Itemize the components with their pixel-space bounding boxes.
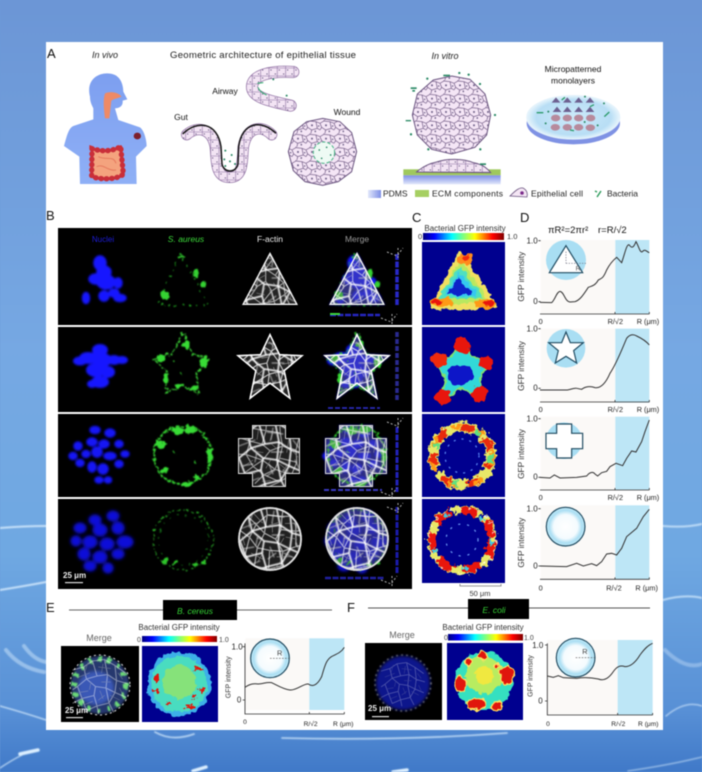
chart: star profile (516, 325, 649, 403)
chart: B. cereus profile: 1.0 (232, 642, 243, 651)
colorbar: 1.0 (219, 637, 229, 644)
chart: E. coli profile: R/√2 (611, 720, 626, 728)
heat map: cross (422, 414, 505, 497)
heat map (447, 643, 523, 720)
merge image (61, 646, 139, 722)
heat map: star (422, 327, 505, 412)
panel C: GFP heat maps (412, 210, 517, 598)
image row: triangle: S. aureus (168, 234, 205, 244)
species header: E. coli: E. coli (482, 605, 507, 615)
chart: E. coli profile: R (μm) (638, 721, 659, 728)
merge image (365, 643, 442, 720)
panel label D: D (520, 210, 529, 225)
chart: cross profile: R/√2 (608, 405, 623, 414)
chart: triangle profile: R (μm) (637, 317, 659, 326)
colorbar (418, 232, 517, 241)
chart: triangle profile: R/√2 (608, 317, 623, 326)
merge image: 25 μm (368, 704, 391, 713)
legend: PDMS, ECM, cell, bacteria: PDMS (383, 188, 408, 198)
colorbar title: Bacterial GFP intensity (138, 623, 220, 632)
chart: triangle profile: 0 (533, 297, 538, 306)
chart: triangle profile: 1.0 (527, 237, 538, 246)
tissue diagram: airway (252, 72, 293, 106)
colorbar (444, 634, 534, 642)
species header: B. cereus (69, 600, 332, 620)
chart: triangle profile: 0 (539, 317, 543, 326)
panel D: intensity charts (516, 210, 659, 593)
panel label F: F (347, 600, 355, 615)
colorbar: 1.0 (507, 232, 517, 241)
colorbar: 1.0 (524, 635, 534, 642)
panel B: confocal images (46, 208, 412, 589)
colorbar: 0 (418, 232, 422, 241)
heading: Micropatterned monolayers: Micropatterned (545, 64, 602, 74)
heat map: triangle (422, 242, 505, 325)
chart: cross profile: 0 (539, 493, 543, 502)
chart: B. cereus profile: 0 (237, 696, 242, 705)
chart: triangle profile: GFP intensity (516, 251, 526, 302)
chart: E. coli profile: 0 (538, 697, 543, 706)
image row: star (58, 325, 412, 412)
chart: cross profile: R (μm) (637, 493, 659, 502)
chart: star profile: 1.0 (527, 325, 538, 334)
label: Merge: Merge (86, 633, 112, 643)
chart: circle profile: GFP intensity (516, 517, 526, 568)
chart: cross profile: 0 (533, 473, 538, 482)
panel label E: E (46, 600, 55, 615)
image row: triangle: Merge (345, 234, 369, 244)
image row: triangle (58, 228, 412, 326)
merge image: 25 μm (65, 706, 88, 715)
panel label B: B (46, 208, 55, 223)
image row: circle (58, 496, 412, 589)
chart: star profile: GFP intensity (516, 340, 526, 391)
chart: B. cereus profile: R (277, 649, 282, 658)
colorbar title: Bacterial GFP intensity (424, 224, 506, 233)
chart: E. coli profile: 0 (546, 721, 550, 728)
species header: B. cereus: B. cereus (177, 606, 214, 616)
heat map (142, 646, 218, 722)
colorbar: 0 (444, 635, 448, 642)
chart: E. coli profile: R (582, 647, 588, 656)
chart: E. coli profile (528, 638, 659, 728)
diagram: culture dish with micropatterns (527, 95, 620, 144)
colorbar (137, 636, 229, 644)
legend: PDMS, ECM, cell, bacteria: Bacteria (607, 188, 638, 198)
panel F: E. coli (347, 599, 659, 728)
chart: cross profile: R/√2 (608, 493, 623, 502)
species header: E. coli (368, 599, 650, 619)
heading: In vitro: In vitro (431, 51, 459, 61)
chart: circle profile (516, 505, 658, 593)
legend: PDMS, ECM, cell, bacteria: Epithelial cell (531, 188, 583, 198)
image row: triangle: F-actin (257, 234, 283, 244)
heading: In vivo: In vivo (92, 50, 118, 60)
panel label C: C (412, 210, 421, 225)
chart: E. coli profile: 1.0 (532, 641, 544, 650)
label: Wound: Wound (334, 107, 361, 117)
legend: PDMS, ECM, cell, bacteria (368, 188, 638, 198)
diagram: in vitro monolayer top and side views (403, 72, 501, 184)
chart: B. cereus profile: R/√2 (304, 720, 318, 728)
chart: B. cereus profile: GFP intensity (226, 656, 233, 698)
heat map: circle (422, 499, 505, 583)
chart: triangle profile: R (576, 266, 581, 273)
chart: triangle profile (516, 237, 659, 326)
chart: circle profile: R (μm) (635, 584, 658, 593)
chart: cross profile: 1.0 (527, 415, 538, 424)
panel A: tissue geometry schematic (47, 46, 638, 198)
formula: r=R/√2 (598, 225, 627, 236)
tissue diagram: gut (183, 125, 276, 177)
scale bar: 50 μm (460, 584, 501, 598)
image row: circle: 25 μm (63, 571, 86, 580)
scale bar: 50 μm: 50 μm (470, 589, 490, 598)
chart: B. cereus profile: 0 (243, 719, 247, 726)
label: Airway: Airway (212, 86, 238, 96)
colorbar title: Bacterial GFP intensity (442, 623, 524, 632)
image row: cross (58, 413, 412, 498)
chart: circle profile: 0 (533, 561, 538, 570)
chart: B. cereus profile (226, 638, 354, 728)
panel E: B. cereus (46, 600, 354, 728)
chart: cross profile: 0 (539, 405, 543, 414)
chart: circle profile: 1.0 (527, 505, 538, 514)
label: Gut: Gut (174, 112, 188, 122)
icon: human body with infected sites (64, 73, 147, 184)
chart: cross profile: GFP intensity (516, 428, 526, 479)
chart: E. coli profile: GFP intensity (528, 655, 535, 697)
chart: circle profile: 0 (539, 584, 543, 593)
chart: B. cereus profile: R (μm) (333, 721, 354, 728)
panel label A: A (47, 46, 56, 61)
image row: triangle: Nuclei (92, 235, 114, 244)
chart: cross profile: R (μm) (637, 405, 659, 414)
chart: cross profile (516, 405, 659, 502)
tissue diagram: wound (288, 118, 357, 185)
colorbar: 0 (137, 637, 141, 644)
heading: Micropatterned monolayers: monolayers (551, 76, 595, 86)
legend: PDMS, ECM, cell, bacteria: ECM components (432, 188, 503, 198)
formula: πR²=2πr² (548, 225, 588, 236)
chart: star profile: 0 (533, 384, 538, 393)
label: Merge: Merge (389, 630, 415, 640)
white figure panel (46, 42, 663, 730)
heading: geometric architecture: Geometric architecture of epithelial tissue (170, 50, 356, 61)
chart: circle profile: R/√2 (606, 584, 622, 593)
